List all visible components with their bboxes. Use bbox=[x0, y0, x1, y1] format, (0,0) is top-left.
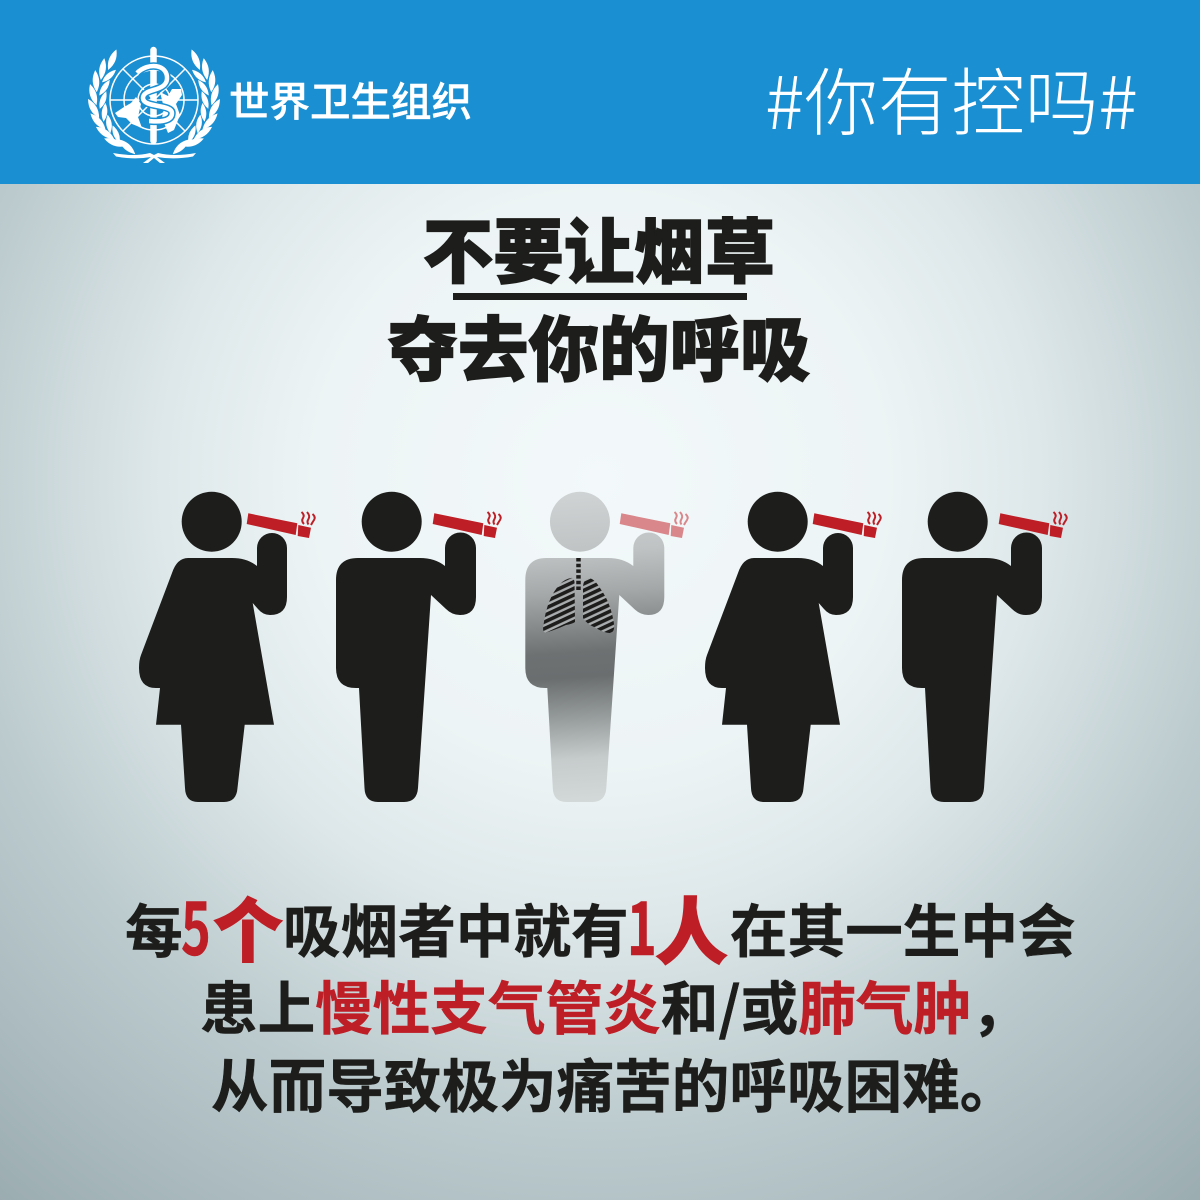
cigarette 5 bbox=[999, 512, 1067, 538]
body text line 1: 1 bbox=[627, 871, 657, 976]
figure: faded man with lungs bbox=[525, 492, 664, 802]
globe bbox=[110, 56, 198, 144]
snake body bbox=[137, 66, 172, 121]
continents bbox=[115, 89, 182, 133]
body text line 3: 从而导致极为痛苦的呼吸困难。 bbox=[211, 1040, 1017, 1124]
body text line 1: 个 bbox=[213, 876, 283, 977]
body text line 1: 每 bbox=[125, 885, 183, 969]
body text line 1 bbox=[125, 871, 1076, 980]
cigarette 1 bbox=[247, 512, 315, 538]
title line 1: 不要让烟草 bbox=[423, 196, 775, 298]
cigarette 4 bbox=[813, 512, 881, 538]
figure: man smoker 2 bbox=[336, 492, 476, 802]
figure: man smoker 5 bbox=[902, 492, 1042, 802]
body text line 1: 人 bbox=[655, 874, 728, 980]
figure: woman smoker 1 bbox=[139, 492, 287, 802]
header bar bbox=[0, 0, 1200, 184]
title line 2: 夺去你的呼吸 bbox=[388, 294, 810, 396]
body text line 2: 患上慢性支气管炎和/或肺气肿， bbox=[200, 962, 1029, 1046]
icon: WHO emblem bbox=[88, 46, 220, 163]
body text line 1: 吸烟者中就有 bbox=[283, 885, 629, 969]
organisation name: 世界卫生组织 bbox=[229, 69, 472, 128]
rod bbox=[150, 50, 157, 141]
ribbon bbox=[113, 153, 196, 163]
cigarette 2 bbox=[433, 512, 501, 538]
campaign hashtag: #你有控吗# bbox=[765, 45, 1138, 151]
cigarette 3 (faded) bbox=[620, 512, 688, 538]
icon: lungs bbox=[543, 558, 614, 633]
figure: woman smoker 4 bbox=[705, 492, 853, 802]
snake bbox=[137, 66, 172, 121]
body text line 1: 5 bbox=[181, 871, 211, 976]
body text line 1: 在其一生中会 bbox=[730, 885, 1076, 969]
laurel wreath bbox=[86, 49, 222, 156]
title divider bbox=[453, 293, 747, 300]
